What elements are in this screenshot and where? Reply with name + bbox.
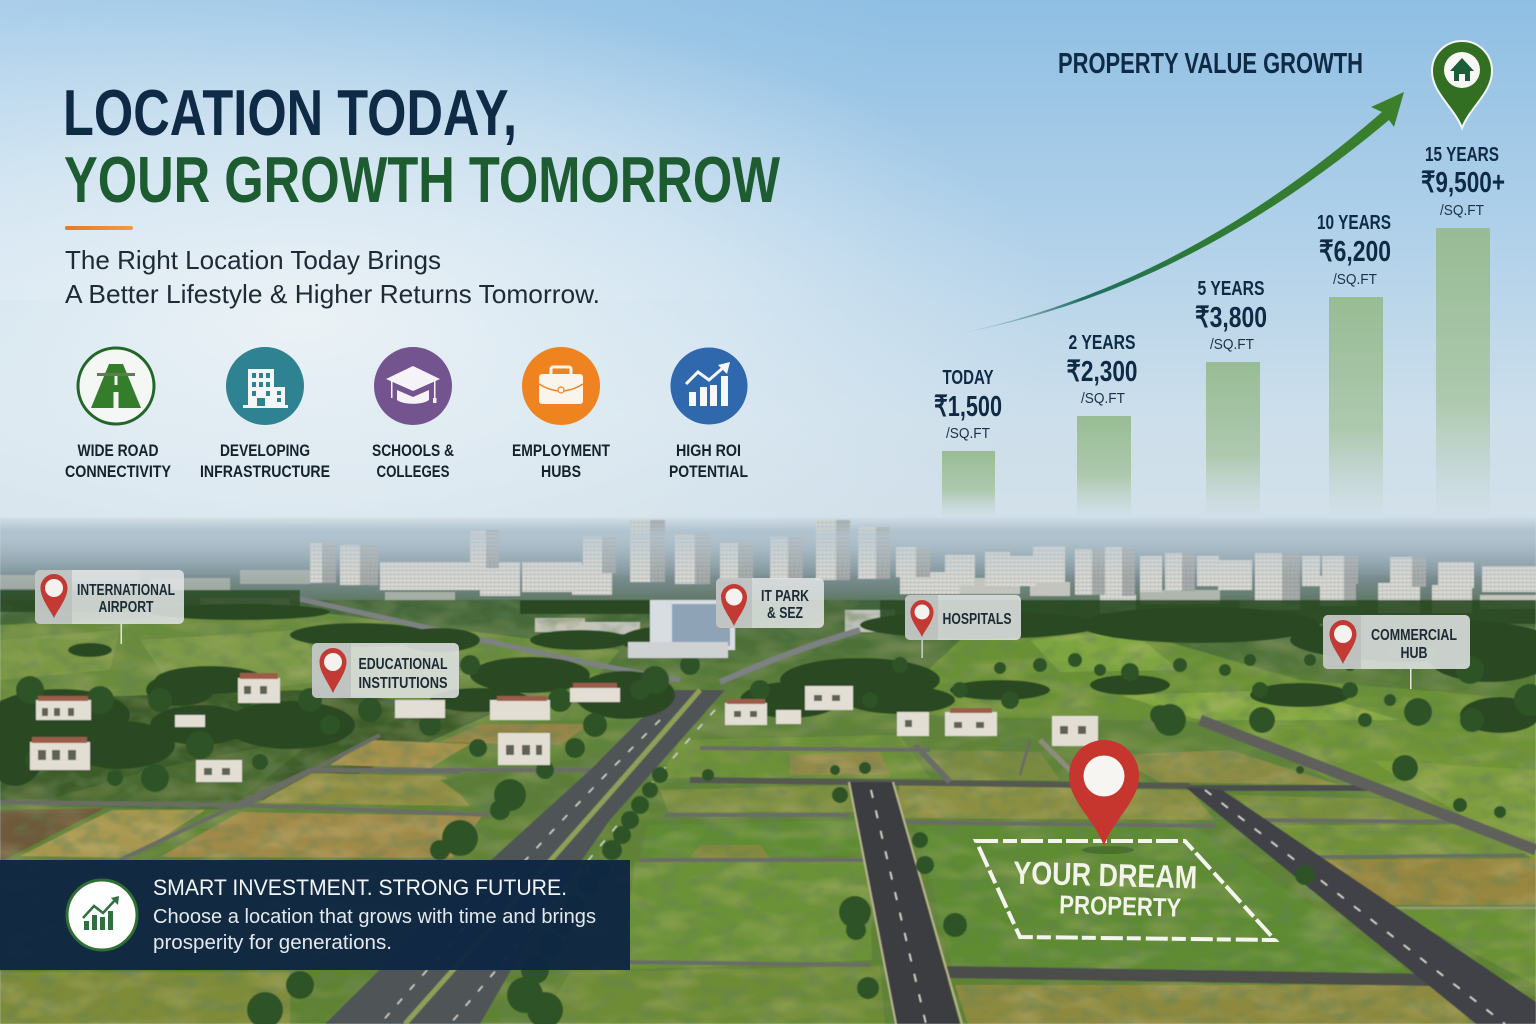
- location tag: hospitals: HOSPITALS: [942, 611, 1012, 628]
- location tag: commercial hub: HUB: [1400, 645, 1428, 662]
- location tag: commercial hub: COMMERCIAL: [1371, 627, 1457, 644]
- feature: wide road connectivity: WIDE ROAD: [78, 441, 158, 460]
- feature: high roi potential: HIGH ROI: [676, 441, 741, 460]
- bottom banner: [0, 860, 630, 970]
- ground base: [0, 600, 1536, 1024]
- feature: employment hubs: EMPLOYMENT: [512, 441, 610, 460]
- banner body: Choose a location that grows with time and brings: [153, 906, 596, 928]
- title: [63, 76, 780, 216]
- location tag: commercial hub: [1323, 615, 1470, 689]
- feature: schools and colleges: COLLEGES: [376, 462, 450, 481]
- feature: employment hubs: [512, 347, 610, 481]
- bar: today: ₹1,500: [934, 391, 1002, 423]
- location tag: it park and sez: IT PARK: [761, 588, 809, 605]
- location tag: hospitals: [905, 595, 1021, 658]
- vertical street: [849, 782, 962, 1024]
- title: LOCATION TODAY,: [63, 76, 517, 149]
- chart title: PROPERTY VALUE GROWTH: [1058, 48, 1363, 80]
- subtitle: A Better Lifestyle & Higher Returns Tomorrow.: [65, 279, 600, 309]
- diagonal street: [1185, 787, 1536, 1024]
- subtitle: [65, 245, 600, 309]
- distant haze horizon: [0, 515, 1536, 610]
- main divided highway: [325, 690, 725, 1024]
- bar: today: [934, 367, 1002, 517]
- property value bar chart: [934, 144, 1505, 517]
- feature: developing infrastructure: DEVELOPING: [220, 441, 310, 460]
- bar: 5 years: ₹3,800: [1195, 302, 1267, 334]
- bar: 5 years: [1195, 278, 1267, 517]
- banner body: prosperity for generations.: [153, 932, 392, 954]
- growth arrow: [958, 92, 1404, 334]
- bar: 2 years: 2 YEARS: [1068, 332, 1136, 354]
- title underline accent: [65, 226, 133, 230]
- bar: 2 years: [1066, 332, 1138, 517]
- feature: high roi potential: POTENTIAL: [669, 462, 748, 481]
- feature: wide road connectivity: CONNECTIVITY: [65, 462, 172, 481]
- location tag: international airport: [35, 570, 184, 644]
- icon: briefcase: [522, 347, 600, 425]
- tan and green plots, left of highway: [0, 724, 600, 1024]
- icon: road: [78, 348, 154, 424]
- low rise town band: [0, 570, 1536, 648]
- bar: 10 years: [1317, 212, 1391, 517]
- bar: 10 years: 10 YEARS: [1317, 212, 1391, 234]
- location tag: international airport: AIRPORT: [98, 599, 154, 616]
- dream property ground text: [1013, 856, 1198, 923]
- bar: today: /SQ.FT: [946, 425, 990, 442]
- bar: 5 years: /SQ.FT: [1210, 336, 1254, 353]
- icon: growth chart badge: [67, 880, 137, 950]
- icon: buildings: [226, 347, 304, 425]
- feature: developing infrastructure: [200, 347, 330, 481]
- dashed plot outline: [976, 841, 1275, 940]
- dream plot ground: [916, 826, 1410, 972]
- field texture: [0, 600, 1536, 1024]
- subtitle: The Right Location Today Brings: [65, 245, 441, 275]
- dream property ground text: YOUR DREAM: [1013, 856, 1198, 896]
- bar: today: TODAY: [942, 367, 994, 389]
- bar: 15 years: ₹9,500+: [1421, 167, 1505, 199]
- green home pin: [1432, 41, 1492, 128]
- icon: rising chart: [670, 348, 748, 424]
- title: YOUR GROWTH TOMORROW: [64, 143, 780, 216]
- residential side roads: [0, 597, 1536, 980]
- feature: schools and colleges: [372, 347, 454, 481]
- location tag: educational institutions: EDUCATIONAL: [358, 656, 448, 673]
- city skyline: [310, 520, 1536, 613]
- bar: 2 years: /SQ.FT: [1081, 390, 1125, 407]
- left far green fields: [0, 610, 620, 800]
- banner heading: SMART INVESTMENT. STRONG FUTURE.: [153, 875, 567, 900]
- banner body: [153, 906, 596, 954]
- bar: 15 years: [1421, 144, 1505, 517]
- bar: 15 years: /SQ.FT: [1440, 202, 1484, 219]
- far right green fields: [880, 628, 1536, 860]
- feature: employment hubs: HUBS: [541, 462, 581, 481]
- large red location pin: [1069, 740, 1139, 854]
- green plots, right of highway: [540, 735, 1536, 1024]
- bar: 10 years: /SQ.FT: [1333, 271, 1377, 288]
- horizon haze overlay: [0, 518, 1536, 578]
- icon: graduation cap: [374, 347, 452, 425]
- feature: wide road connectivity: [65, 348, 172, 481]
- location tag: educational institutions: INSTITUTIONS: [358, 675, 448, 692]
- bar: 2 years: ₹2,300: [1066, 356, 1138, 388]
- office building: [628, 600, 735, 658]
- location tag: international airport: INTERNATIONAL: [77, 582, 175, 599]
- feature: developing infrastructure: INFRASTRUCTURE: [200, 462, 330, 481]
- feature: high roi potential: [669, 348, 748, 481]
- feature: schools and colleges: SCHOOLS &: [372, 441, 454, 460]
- location tag: educational institutions: [312, 643, 459, 698]
- bar: 10 years: ₹6,200: [1319, 236, 1391, 268]
- location tag: it park and sez: & SEZ: [767, 605, 803, 622]
- location tag: it park and sez: [716, 578, 824, 628]
- scattered trees: [16, 640, 1536, 1024]
- dream property ground text: PROPERTY: [1059, 889, 1182, 923]
- tree clusters: [0, 590, 1536, 786]
- tower shaded sides: [322, 520, 1426, 606]
- bar: 5 years: 5 YEARS: [1198, 278, 1264, 300]
- sky background: [0, 0, 1536, 560]
- houses: [30, 673, 1098, 782]
- bar: 15 years: 15 YEARS: [1425, 144, 1499, 166]
- aerial landscape scene: [0, 515, 1536, 1024]
